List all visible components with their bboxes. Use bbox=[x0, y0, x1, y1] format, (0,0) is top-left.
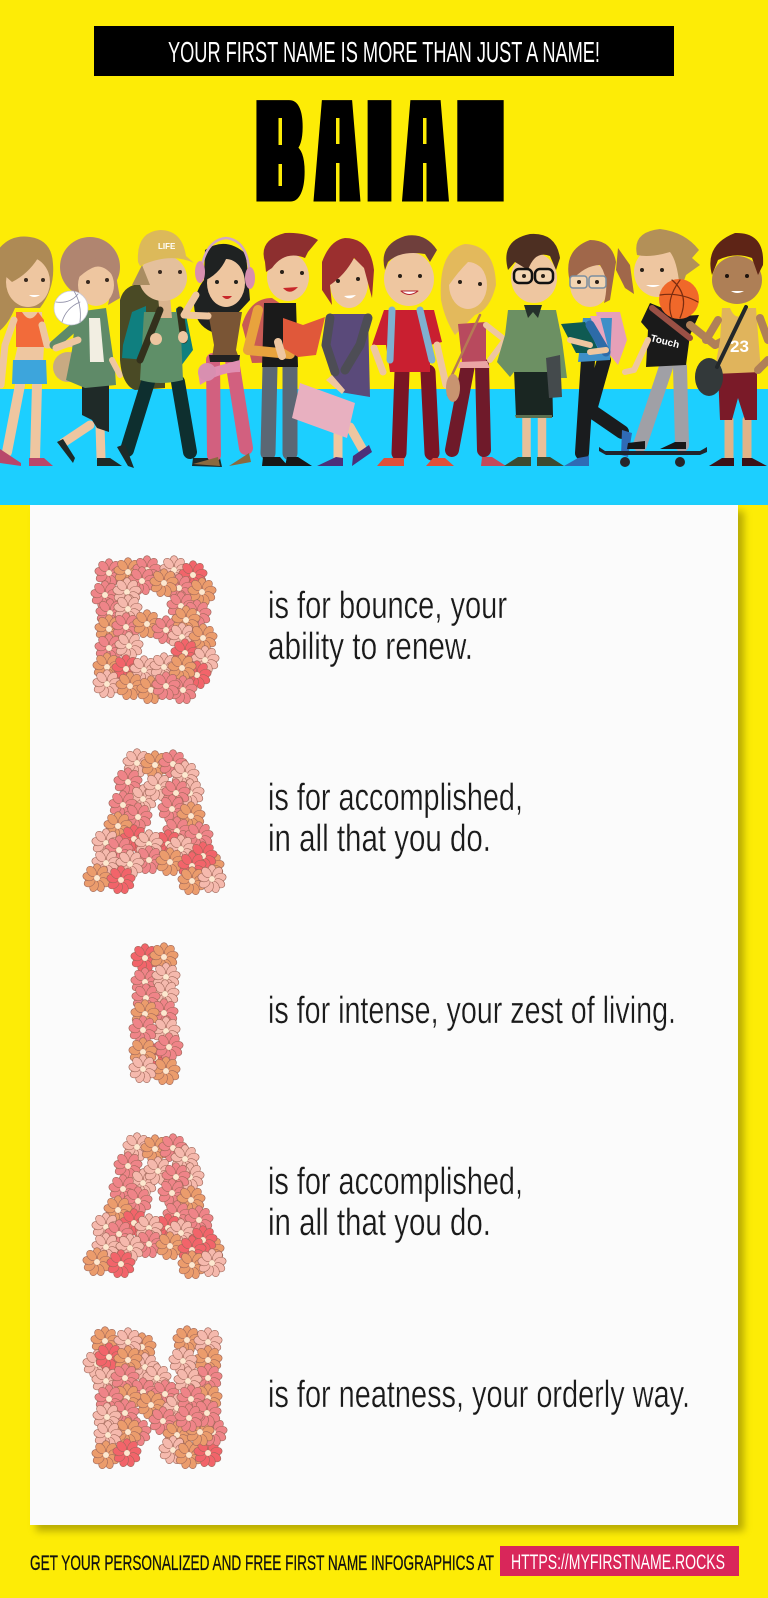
title: name: A bbox=[414, 72, 437, 229]
row: letter A bbox=[82, 749, 523, 896]
character: hiker with cap and backpack bbox=[117, 230, 222, 468]
blue floor band bbox=[0, 389, 768, 505]
text: A meaning: in all that you do. bbox=[268, 1202, 491, 1244]
footer: call to action bbox=[30, 1546, 739, 1576]
title: name bbox=[262, 72, 498, 229]
text: A meaning: in all that you do. bbox=[268, 818, 491, 860]
flower letter A bbox=[82, 1133, 227, 1280]
flower letter B bbox=[90, 556, 220, 705]
character: boy reading a red book bbox=[242, 233, 325, 466]
character: ponytail girl holding a tablet bbox=[561, 240, 634, 466]
flower letter A bbox=[82, 749, 227, 896]
row: letter I bbox=[128, 943, 676, 1086]
character: boy with glasses and green sweater bbox=[497, 234, 567, 466]
flower letter I bbox=[128, 943, 184, 1086]
row: letter N bbox=[82, 1326, 690, 1470]
character: girl with green jacket and volleyball bbox=[53, 237, 122, 466]
title: name: A bbox=[326, 72, 348, 229]
text: A meaning: is for accomplished, bbox=[268, 1161, 523, 1203]
character: hiker with cap and backpack: LIFE bbox=[158, 242, 176, 251]
character: curly-haired boy in yellow tank top: 23 bbox=[730, 337, 749, 356]
character: skateboarder with basketball: Touch bbox=[649, 333, 680, 351]
character: curly-haired boy in yellow tank top bbox=[695, 233, 768, 466]
illustration: group of twelve young people bbox=[0, 229, 768, 468]
character: girl with orange top bbox=[0, 237, 78, 466]
panel: top banner bbox=[94, 26, 674, 76]
title: name: B bbox=[262, 72, 298, 229]
flower letter N bbox=[82, 1326, 228, 1470]
character: boy with red shirt bbox=[372, 235, 454, 466]
character: girl with red hair and pink bag bbox=[292, 238, 376, 466]
text: A meaning: is for accomplished, bbox=[268, 777, 523, 819]
character: blonde girl with pink top bbox=[441, 244, 506, 466]
text: N bbox=[464, 72, 498, 229]
skateboard bbox=[599, 447, 707, 467]
character: girl with pink headphones bbox=[184, 238, 255, 466]
row: second letter A bbox=[82, 1133, 523, 1280]
row: letter B bbox=[90, 556, 507, 705]
footer text: GET YOUR PERSONALIZED AND FREE FIRST NAME INFOGRAPHICS AT bbox=[30, 1552, 494, 1575]
panel: white letters panel bbox=[30, 505, 744, 1531]
title counters bbox=[278, 118, 426, 204]
title: name: I bbox=[374, 72, 386, 229]
character: skateboarder with basketball bbox=[599, 229, 735, 467]
footer link badge bbox=[500, 1546, 739, 1576]
text: B meaning: ability to renew. bbox=[268, 626, 473, 668]
text: B meaning: is for bounce, your bbox=[268, 585, 507, 627]
